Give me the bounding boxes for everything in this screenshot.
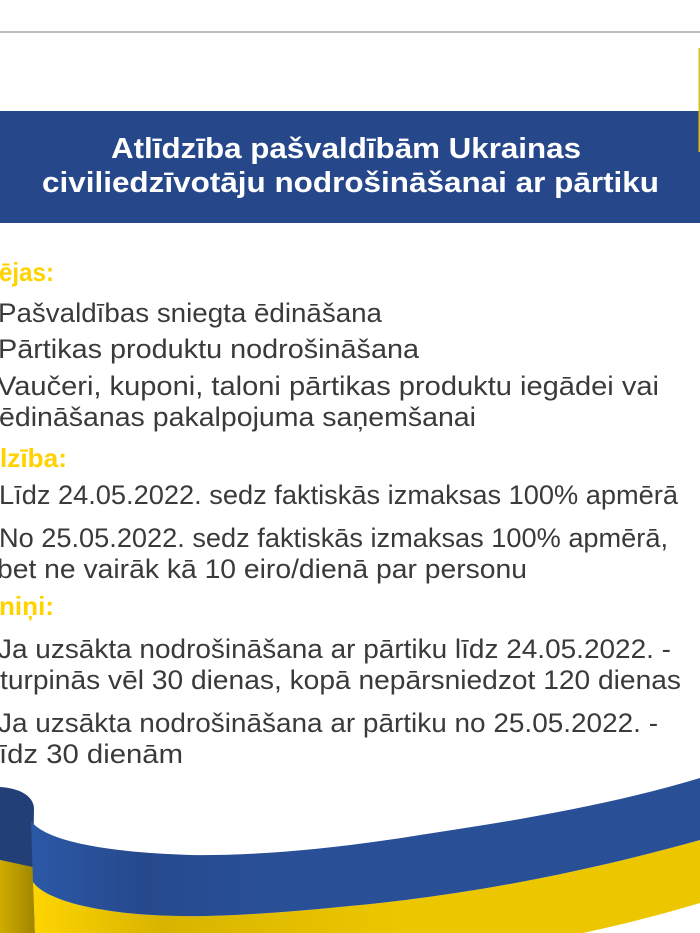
text block: positions list: Vaučeri, kuponi, taloni pārtikas produktu iegādei vai bbox=[0, 371, 659, 401]
text block: compensation terms bbox=[0, 480, 678, 584]
text block: compensation terms: Līdz 24.05.2022. sedz faktiskās izmaksas 100% apmērā bbox=[0, 480, 678, 510]
text block: positions list: Pārtikas produktu nodrošināšana bbox=[0, 334, 419, 364]
text block: positions list: Pašvaldības sniegta ēdināšana bbox=[0, 298, 382, 328]
title line 2: civiliedzīvotāju nodrošināšanai ar pārtiku bbox=[42, 167, 659, 199]
section heading: positions: ējas: bbox=[0, 257, 54, 287]
text block: deadlines: īdz 30 dienām bbox=[0, 739, 183, 769]
title line 1: Atlīdzība pašvaldībām Ukrainas bbox=[111, 133, 581, 165]
ribbon: Ukrainian flag bbox=[0, 778, 700, 933]
text block: positions list: ēdināšanas pakalpojuma saņemšanai bbox=[0, 402, 476, 432]
text block: positions list bbox=[0, 298, 659, 432]
section heading: deadlines: niņi: bbox=[0, 591, 54, 621]
icon: ribbon edge at top right bbox=[698, 48, 700, 152]
text block: compensation terms: bet ne vairāk kā 10 eiro/dienā par personu bbox=[0, 554, 527, 584]
section heading: compensation: lzība: bbox=[0, 443, 67, 473]
text block: deadlines: Ja uzsākta nodrošināšana ar pārtiku no 25.05.2022. - bbox=[0, 708, 658, 738]
text block: deadlines: Ja uzsākta nodrošināšana ar pārtiku līdz 24.05.2022. - bbox=[0, 634, 671, 664]
text block: deadlines: turpinās vēl 30 dienas, kopā nepārsniedzot 120 dienas bbox=[0, 665, 681, 695]
text block: compensation terms: No 25.05.2022. sedz faktiskās izmaksas 100% apmērā, bbox=[0, 523, 668, 553]
title banner bbox=[0, 111, 700, 223]
text block: deadlines bbox=[0, 634, 681, 769]
